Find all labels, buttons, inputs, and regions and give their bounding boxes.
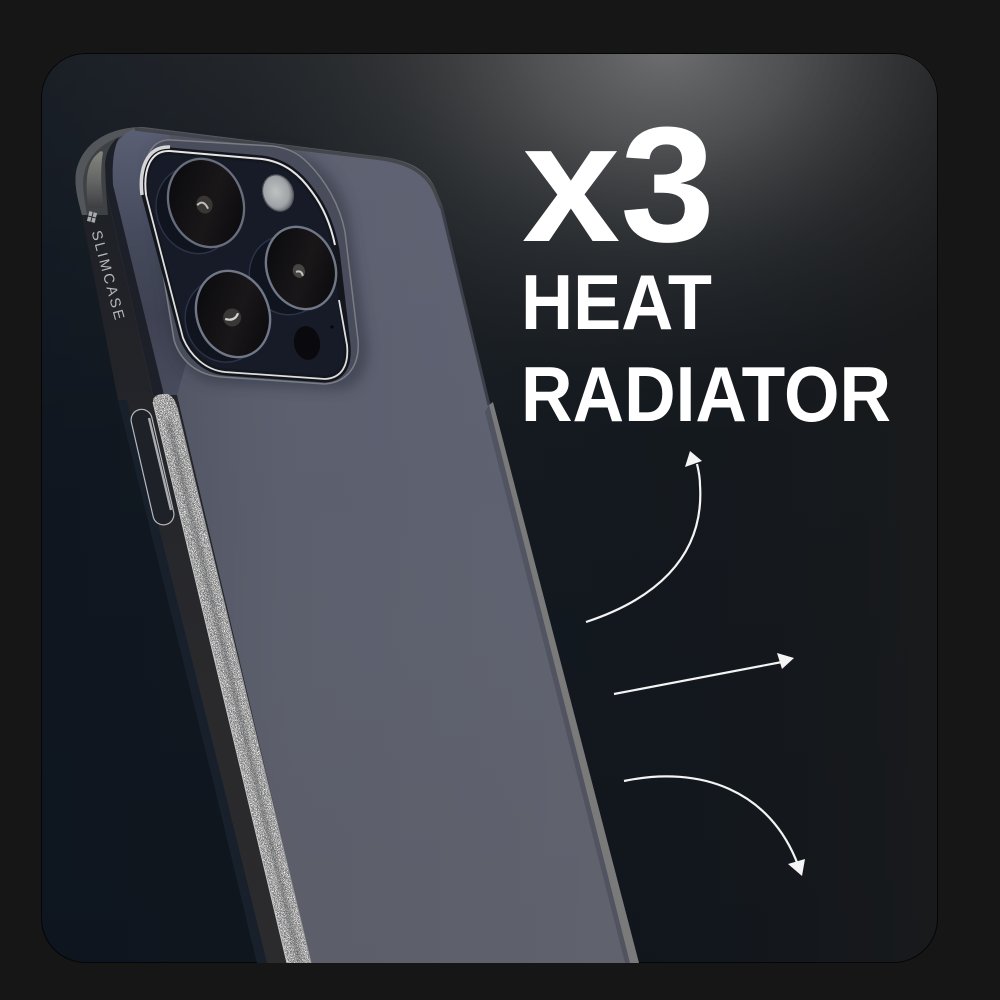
module white rim top: [145, 151, 335, 245]
arrow: pointing right: [614, 653, 794, 694]
case corner rim: [75, 127, 143, 215]
module glass: [145, 151, 347, 379]
flash: [262, 174, 294, 212]
microphone: [330, 326, 334, 328]
heat radiator strip: right edge: [489, 402, 639, 963]
arrow: curving down: [624, 776, 805, 876]
camera module: [141, 140, 358, 384]
translucent bumper: [146, 140, 358, 384]
camera plateau shadow: [176, 150, 370, 392]
glossy corner reflection: [86, 151, 103, 200]
module white rim lower: [146, 195, 347, 379]
upper right dark case edge: [441, 205, 489, 405]
upper left inner case band: [112, 129, 186, 395]
lens right: [264, 226, 338, 310]
lens barrels: [155, 170, 308, 363]
dark band beside the camera: [105, 137, 164, 395]
brand label: SLIMCASE: SLIMCASE: [88, 229, 127, 324]
heading: HEAT: HEAT: [521, 258, 712, 346]
side wall navy edge: [118, 400, 267, 963]
lens top left: [166, 158, 246, 248]
heading: RADIATOR: RADIATOR: [521, 350, 891, 438]
case side wall: [83, 216, 286, 963]
lidar sensor: [294, 326, 320, 360]
side button: [129, 407, 176, 527]
lens bottom: [194, 270, 272, 358]
phone in translucent case: [75, 127, 639, 963]
module white rim top left highlight: [141, 147, 170, 195]
arrow: curving up: [586, 451, 702, 622]
brand icon: [87, 211, 97, 223]
heading: x3: x3: [522, 88, 715, 278]
case corner fill: [76, 128, 131, 215]
top case rim: [135, 129, 441, 207]
heat radiator strip: left side: [153, 394, 311, 963]
back panel of the phone: [106, 127, 636, 963]
